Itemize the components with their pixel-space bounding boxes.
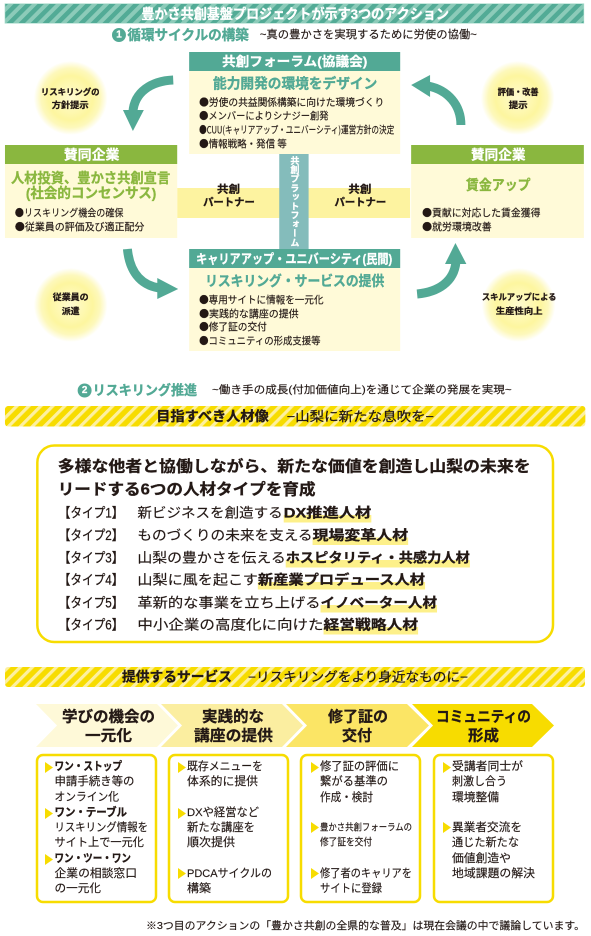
glow: employee dispatch xyxy=(34,268,108,342)
card: practical courses: 既存メニューを xyxy=(187,759,263,773)
card: practical courses: 体系的に提供 xyxy=(187,774,258,788)
card: community: 通じた新たな xyxy=(452,836,519,849)
partner band xyxy=(177,182,410,218)
panel: co-creation forum: 能力開発の環境をデザイン xyxy=(213,75,377,92)
footnote: ※3つ目のアクションの「豊かさ共創の全県的な普及」は現在会議の中で議論しています。 xyxy=(146,919,585,932)
chevron: community xyxy=(412,704,554,747)
card: community: 環境整備 xyxy=(452,790,499,804)
glow: policy presentation xyxy=(34,61,108,135)
chevron: certificate: 修了証の xyxy=(328,708,388,726)
chevron: practical courses xyxy=(161,704,303,747)
panel: career-up university: ●修了証の交付 xyxy=(199,318,267,334)
section heading 2: ~働き手の成長(付加価値向上)を通じて企業の発展を実現~ xyxy=(212,383,512,396)
card: certificate xyxy=(301,755,420,902)
card: community: 刺激し合う xyxy=(452,774,507,788)
chevron: certificate xyxy=(286,704,429,747)
panel: co-creation forum: ●労使の共益関係構築に向けた環境づくり xyxy=(199,94,384,109)
type 6: 【タイプ6】 xyxy=(59,617,123,633)
panel heading xyxy=(58,456,531,499)
section heading 1: ~真の豊かさを実現するために労使の協働~ xyxy=(260,27,477,41)
type 6: 中小企業の高度化に向けた xyxy=(137,616,324,633)
type 5: イノベーター人材 xyxy=(321,594,437,611)
glow: policy presentation: リスキリングの xyxy=(41,87,100,97)
partner band: パートナー xyxy=(334,196,386,209)
type 1 xyxy=(59,504,371,522)
chevron: community: 形成 xyxy=(468,726,499,744)
arrow: bottom left xyxy=(127,249,178,299)
card: community: 価値創造や xyxy=(452,851,511,865)
glow: productivity xyxy=(482,268,556,342)
title banner: 豊かさ共創基盤プロジェクトが示す3つのアクション xyxy=(141,6,449,22)
arrow: top right xyxy=(411,75,461,125)
panel: supporting company left xyxy=(5,145,177,238)
panel: co-creation forum: ●メンバーによりシナジー創発 xyxy=(199,107,329,123)
card: community: 地域課題の解決 xyxy=(452,866,535,880)
type 5: 革新的な事業を立ち上げる xyxy=(137,595,321,611)
type 5 xyxy=(59,594,437,612)
type 4: 山梨に風を起こす xyxy=(137,572,258,588)
type 2: 現場変革人材 xyxy=(313,527,408,543)
card: certificate: サイトに登録 xyxy=(320,881,383,895)
card: certificate: 修了者のキャリアを xyxy=(320,866,412,880)
panel: co-creation forum: ●CUU(キャリアアップ・ユニバーシティ)運営方針の決定 xyxy=(199,121,394,137)
band: services xyxy=(5,667,585,687)
type 2 xyxy=(59,527,408,545)
card: practical courses: DXや経営など xyxy=(187,805,259,819)
card: practical courses: PDCAサイクルの xyxy=(187,867,272,880)
panel: supporting company left: 賛同企業 xyxy=(64,146,120,163)
band: target talent: −山梨に新たな息吹を− xyxy=(287,409,434,424)
glow: productivity: 生産性向上 xyxy=(496,306,543,316)
card: learning opportunity: ワン・ツー・ワン xyxy=(54,853,131,865)
panel: co-creation forum: 共創フォーラム(協議会) xyxy=(222,54,367,69)
chevron: learning opportunity: 一元化 xyxy=(85,728,132,744)
partner band: パートナー xyxy=(203,196,255,209)
section heading 1 xyxy=(112,27,477,43)
glow: productivity: スキルアップによる xyxy=(482,292,556,302)
panel: co-creation forum: ●情報戦略・発信 等 xyxy=(199,135,287,151)
section heading 2: リスキリング推進 xyxy=(93,382,198,398)
card: certificate: 作成・検討 xyxy=(320,790,373,804)
glow: evaluation: 提示 xyxy=(509,100,528,110)
band: services: −リスキリングをより身近なものに− xyxy=(248,670,468,684)
card: learning opportunity: 申請手続き等の xyxy=(54,774,134,788)
panel: supporting company left: ●リスキリング機会の確保 xyxy=(15,204,123,220)
panel: supporting company right xyxy=(411,145,584,238)
card: learning opportunity: 企業の相談窓口 xyxy=(54,866,137,880)
card: practical courses: 順次提供 xyxy=(187,835,235,849)
section heading 2: 2 xyxy=(82,385,88,396)
card: community: 異業者交流を xyxy=(452,821,522,834)
card: learning opportunity xyxy=(37,755,156,902)
type 4: 【タイプ4】 xyxy=(59,572,123,588)
section heading 1: 循環サイクルの構築 xyxy=(127,27,249,43)
type 4 xyxy=(59,571,425,590)
partner band: 共創 xyxy=(217,182,240,196)
panel: career-up university: ●実践的な講座の提供 xyxy=(199,305,299,321)
card: community: 受講者同士が xyxy=(452,759,523,773)
type 1: 【タイプ1】 xyxy=(59,505,123,521)
panel: career-up university: ●専用サイトに情報を一元化 xyxy=(199,291,324,307)
panel: career-up university xyxy=(189,249,400,351)
type 3: ホスピタリティ・共感力人材 xyxy=(286,549,470,566)
panel: supporting company left: 人材投資、豊かさ共創宣言 xyxy=(11,170,170,186)
card: community xyxy=(434,755,553,902)
type 4: 新産業プロデュース人材 xyxy=(258,571,425,588)
card: practical courses: 新たな講座を xyxy=(187,820,255,834)
band: target talent xyxy=(5,406,585,426)
card: learning opportunity: リスキリング情報を xyxy=(54,820,148,834)
band: services: 提供するサービス xyxy=(122,668,232,684)
chevron: certificate: 交付 xyxy=(342,728,372,744)
card: learning opportunity: サイト上で一元化 xyxy=(54,836,144,849)
panel: supporting company right: 賛同企業 xyxy=(471,146,526,163)
panel: six talent types xyxy=(37,446,553,642)
glow: evaluation xyxy=(481,61,554,135)
card: certificate: 修了証の評価に xyxy=(320,759,399,773)
section heading 2 xyxy=(78,382,512,398)
card: certificate: 修了証を交付 xyxy=(320,836,372,848)
panel: co-creation forum xyxy=(189,52,400,154)
title banner xyxy=(5,4,584,23)
platform vertical bar: 共創プラットフォーム xyxy=(289,155,299,247)
card: practical courses: 構築 xyxy=(187,881,211,895)
card: practical courses xyxy=(169,755,288,902)
type 2: 【タイプ2】 xyxy=(59,528,123,543)
card: learning opportunity: ワン・ストップ xyxy=(54,760,123,773)
panel: career-up university: ●コミュニティの形成支援等 xyxy=(199,332,321,348)
section heading 1: 1 xyxy=(116,29,122,41)
type 3: 山梨の豊かさを伝える xyxy=(137,550,286,566)
panel: supporting company right: ●就労環境改善 xyxy=(422,218,492,234)
type 1: 新ビジネスを創造する xyxy=(137,505,283,521)
type 1: DX推進人材 xyxy=(284,504,371,521)
partner band: 共創 xyxy=(348,182,371,196)
chevron: practical courses: 講座の提供 xyxy=(194,726,273,744)
type 5: 【タイプ5】 xyxy=(59,595,123,611)
arrow: bottom right xyxy=(417,243,466,294)
arrow: top left xyxy=(123,80,173,131)
type 3 xyxy=(59,549,470,568)
band: target talent: 目指すべき人材像 xyxy=(156,408,269,424)
type 6 xyxy=(59,616,418,634)
glow: policy presentation: 方針提示 xyxy=(52,100,89,110)
card: learning opportunity: の一元化 xyxy=(54,882,101,895)
platform vertical bar xyxy=(279,154,309,249)
panel: career-up university: リスキリング・サービスの提供 xyxy=(205,273,384,289)
chevron: practical courses: 実践的な xyxy=(202,708,264,726)
card: learning opportunity: オンライン化 xyxy=(54,790,119,804)
glow: employee dispatch: 派遣 xyxy=(62,306,80,316)
panel: supporting company right: 賃金アップ xyxy=(466,177,531,193)
chevron: learning opportunity xyxy=(36,704,178,747)
card: certificate: 繋がる基準の xyxy=(320,774,388,788)
glow: employee dispatch: 従業員の xyxy=(53,292,89,302)
panel heading: リードする6つの人材タイプを育成 xyxy=(58,479,316,499)
panel: supporting company right: ●貢献に対応した賃金獲得 xyxy=(422,204,541,220)
card: certificate: 豊かさ共創フォーラムの xyxy=(320,822,412,834)
card: learning opportunity: ワン・テーブル xyxy=(54,805,127,819)
panel heading: 多様な他者と協働しながら、新たな価値を創造し山梨の未来を xyxy=(58,456,531,476)
type 2: ものづくりの未来を支える xyxy=(137,528,313,543)
panel: career-up university: キャリアアップ・ユニバーシティ(民間) xyxy=(196,251,392,267)
chevron: community: コミュニティの xyxy=(436,708,531,726)
panel: supporting company left: ●従業員の評価及び適正配分 xyxy=(15,218,144,234)
type 3: 【タイプ3】 xyxy=(59,550,123,566)
panel: supporting company left: (社会的コンセンサス) xyxy=(26,185,156,201)
chevron: learning opportunity: 学びの機会の xyxy=(62,708,155,726)
glow: evaluation: 評価・改善 xyxy=(498,87,539,97)
type 6: 経営戦略人材 xyxy=(324,616,418,633)
